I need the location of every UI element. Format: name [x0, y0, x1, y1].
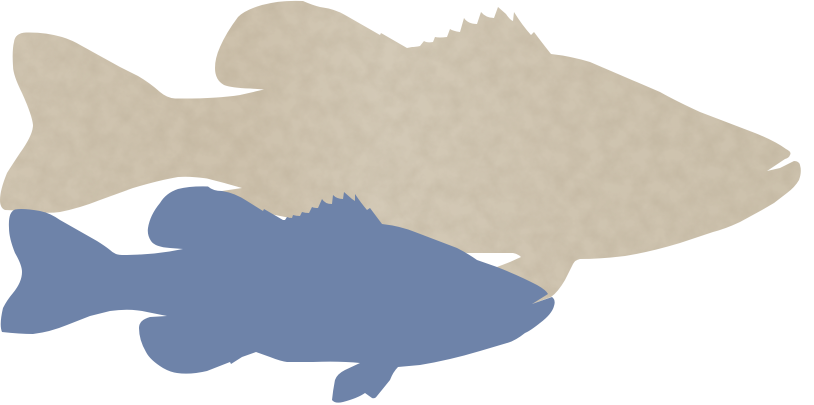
large tan fish silhouette	[0, 1, 801, 304]
small blue fish silhouette	[1, 186, 555, 403]
